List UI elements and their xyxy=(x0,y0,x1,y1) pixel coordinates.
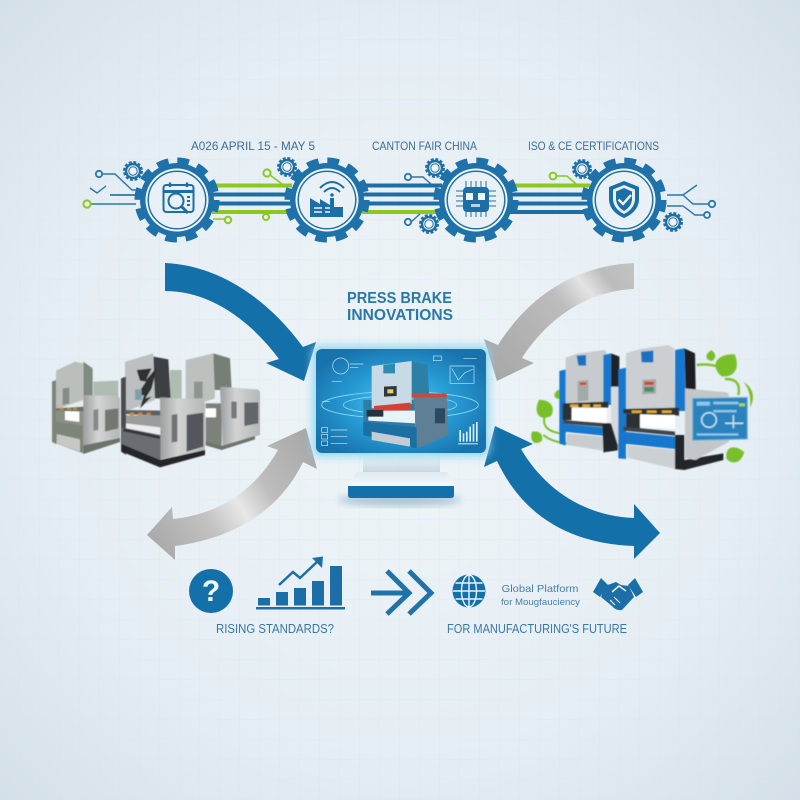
connector lines xyxy=(212,186,590,212)
gear 2: connected factory xyxy=(288,162,366,238)
title xyxy=(347,290,453,324)
hologram rings xyxy=(322,392,478,418)
small gears xyxy=(125,159,681,232)
icon: handshake xyxy=(593,578,643,610)
label: dates: A026 APRIL 15 - MAY 5 xyxy=(191,139,315,153)
machine: front dark xyxy=(121,353,205,467)
gear 4: security shield xyxy=(586,162,662,238)
timeline: gears and circuit lines xyxy=(83,159,715,238)
icon: question mark xyxy=(189,569,233,613)
arrow: top-right grey into monitor xyxy=(484,263,634,381)
press brake illustration on screen xyxy=(322,356,478,448)
monitor stand xyxy=(338,453,462,506)
label: certifications: ISO & CE CERTIFICATIONS xyxy=(528,139,659,153)
platform text xyxy=(501,583,580,608)
bar chart with rising arrow xyxy=(256,556,345,610)
platform text: for Mougfauciency xyxy=(501,597,580,608)
label: venue: CANTON FAIR CHINA xyxy=(372,139,477,153)
monitor screen xyxy=(316,349,486,453)
monitor xyxy=(311,344,491,506)
double chevron arrow xyxy=(371,571,431,614)
timeline labels xyxy=(191,139,659,153)
caption: rising standards: RISING STANDARDS? xyxy=(216,622,334,636)
machine body xyxy=(363,361,448,448)
title: INNOVATIONS xyxy=(347,307,453,324)
gear 1: calendar search xyxy=(138,162,216,238)
bottom row xyxy=(189,556,643,636)
machine: rear left xyxy=(52,362,120,454)
icon: question mark: ? xyxy=(202,575,220,608)
circuit traces xyxy=(90,171,715,225)
arrow: bottom-left grey double-headed xyxy=(147,428,317,560)
machine: rear xyxy=(559,350,619,452)
right machines: modern blue press brakes with leaves xyxy=(528,345,753,470)
title: PRESS BRAKE xyxy=(347,290,452,307)
left machines: legacy grey press brakes xyxy=(52,353,260,467)
caption: manufacturing future: FOR MANUFACTURING'S FUTURE xyxy=(447,622,627,636)
arrow: top-left blue into monitor xyxy=(165,263,316,381)
gear 3: microchip xyxy=(438,162,514,238)
leaves xyxy=(528,349,753,466)
machine: front xyxy=(618,345,747,470)
platform text: Global Platform xyxy=(502,583,579,595)
machine: rear right xyxy=(170,353,260,450)
icon: globe xyxy=(452,574,486,608)
arrow: bottom-right blue double-headed xyxy=(484,426,660,559)
screen chart widgets xyxy=(322,356,477,446)
